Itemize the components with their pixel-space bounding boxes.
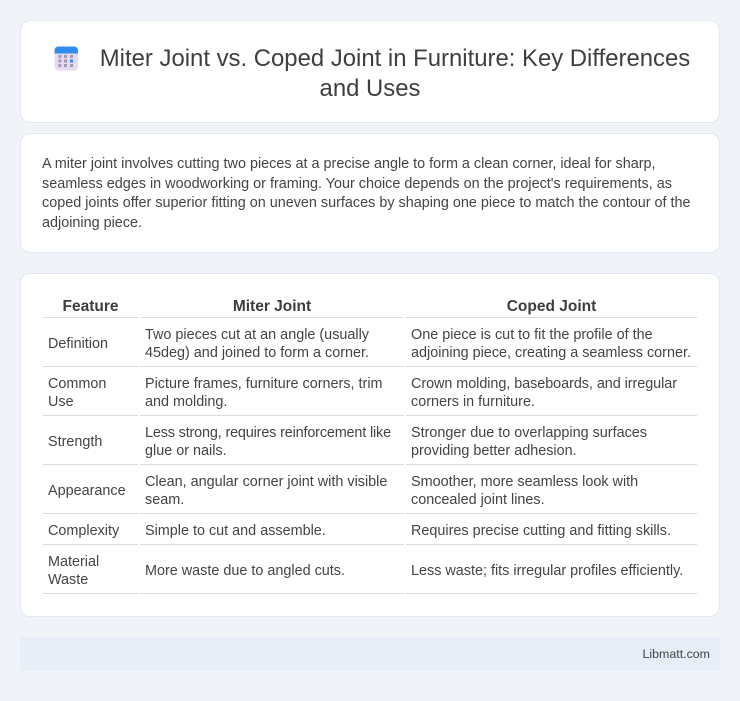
table header: Miter Joint xyxy=(233,298,311,315)
row: common use: corners in furniture. xyxy=(411,394,535,410)
table header: Feature xyxy=(62,298,118,315)
panel: introduction xyxy=(20,133,720,253)
panel: comparison table xyxy=(20,273,720,617)
intro text: coped joints offer superior fitting on uneven surfaces by shaping one piece to match the contour of the xyxy=(42,195,691,211)
row: common use: Crown molding, baseboards, and irregular xyxy=(411,376,677,392)
row: material waste: More waste due to angled cuts. xyxy=(145,563,345,579)
row: definition: 45deg) and joined to form a corner. xyxy=(145,345,369,361)
row: definition: One piece is cut to fit the profile of the xyxy=(411,327,653,343)
footer text: Libmatt.com xyxy=(643,647,710,661)
row: strength xyxy=(48,425,647,459)
row: common use: Use xyxy=(48,394,74,410)
row: material waste: Material xyxy=(48,554,99,570)
intro text: A miter joint involves cutting two pieces at a precise angle to form a clean corner, ideal for sharp, xyxy=(42,156,656,172)
table header xyxy=(62,298,596,315)
row: strength: Less strong, requires reinforcement like xyxy=(145,425,391,441)
row: strength: Stronger due to overlapping surfaces xyxy=(411,425,647,441)
row: definition: adjoining piece, creating a seamless corner. xyxy=(411,345,691,361)
row: complexity: Simple to cut and assemble. xyxy=(145,523,326,539)
footer bar xyxy=(20,637,720,671)
row: common use: and molding. xyxy=(145,394,227,410)
row: common use: Picture frames, furniture corners, trim xyxy=(145,376,383,392)
row: strength: Strength xyxy=(48,434,102,450)
row: appearance: concealed joint lines. xyxy=(411,492,545,508)
row: material waste xyxy=(48,554,683,588)
row: appearance: Appearance xyxy=(48,483,126,499)
row: common use xyxy=(48,376,677,410)
row: definition: Two pieces cut at an angle (usually xyxy=(145,327,369,343)
row: complexity xyxy=(48,523,671,539)
title: Miter Joint vs. Coped Joint in Furniture: Key Differences xyxy=(100,45,690,72)
row: appearance: seam. xyxy=(145,492,184,508)
row: appearance xyxy=(48,474,638,508)
row: appearance: Smoother, more seamless look with xyxy=(411,474,638,490)
title: and Uses xyxy=(320,75,420,102)
intro text: seamless edges in woodworking or framing. Your choice depends on the project's requirements, as xyxy=(42,176,672,192)
row: common use: Common xyxy=(48,376,106,392)
row: definition: Definition xyxy=(48,336,108,352)
row: complexity: Complexity xyxy=(48,523,119,539)
title xyxy=(100,45,690,102)
intro text xyxy=(42,156,691,231)
table header: Coped Joint xyxy=(507,298,596,315)
intro text: adjoining piece. xyxy=(42,215,142,231)
row: strength: providing better adhesion. xyxy=(411,443,577,459)
row: definition xyxy=(48,327,691,361)
row: complexity: Requires precise cutting and fitting skills. xyxy=(411,523,671,539)
row: strength: glue or nails. xyxy=(145,443,227,459)
panel: title card xyxy=(20,20,720,123)
row: material waste: Less waste; fits irregular profiles efficiently. xyxy=(411,563,683,579)
row: appearance: Clean, angular corner joint with visible xyxy=(145,474,387,490)
row: material waste: Waste xyxy=(48,572,88,588)
icon: calendar xyxy=(54,46,78,70)
